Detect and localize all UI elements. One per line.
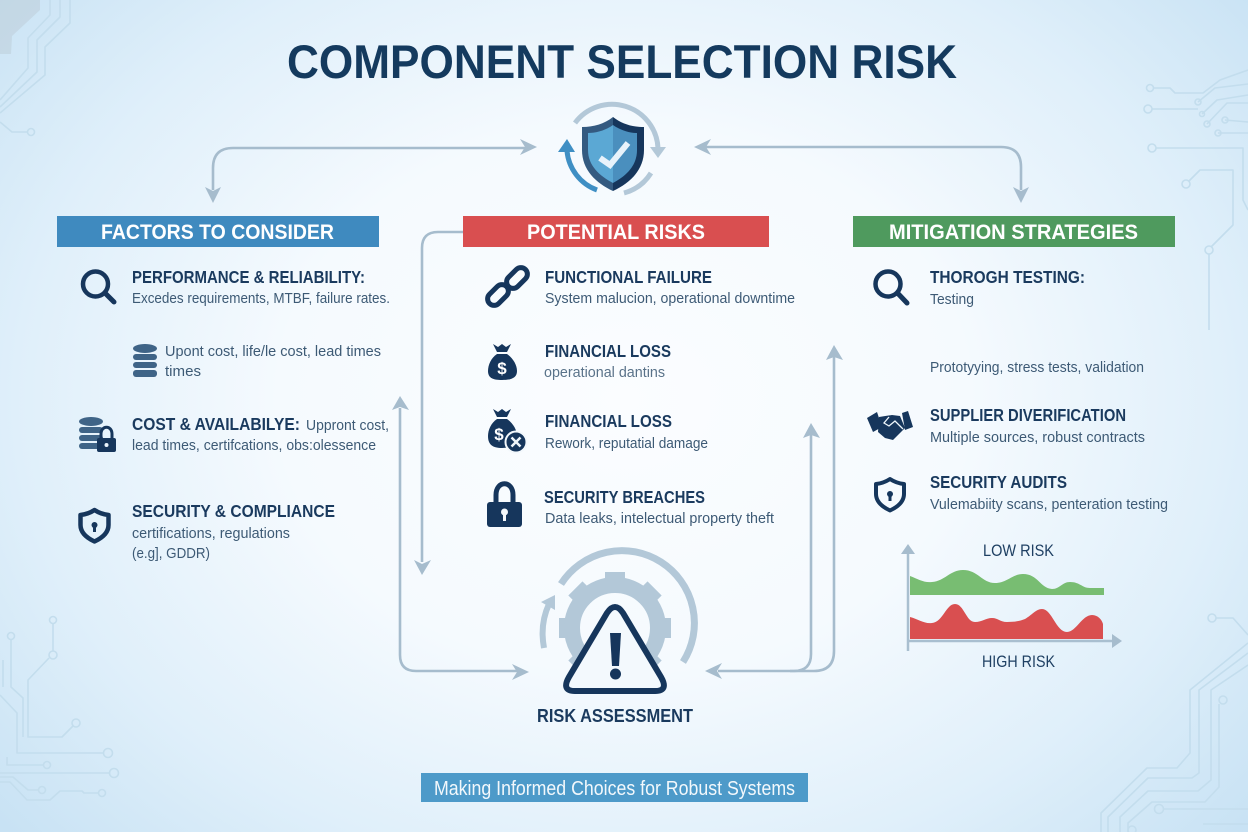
text: thorough testing: THOROGH TESTING: (930, 267, 1085, 287)
text: supplier diversification (930, 405, 1145, 446)
label: high risk: HIGH RISK (982, 653, 1055, 671)
text: cost and availability (132, 414, 389, 454)
icon: chain link (485, 265, 530, 308)
text: financial loss two: FINANCIAL LOSS (545, 411, 672, 431)
text: functional failure: System malucion, operational downtime (545, 290, 795, 307)
text: cost and availability: lead times, certifcations, obs:olessence (132, 437, 376, 454)
heading: factors to consider (57, 216, 379, 247)
text: security audits: SECURITY AUDITS (930, 472, 1067, 492)
text: security breaches: Data leaks, intelectual property theft (545, 510, 775, 527)
text: supplier diversification: Multiple sources, robust contracts (930, 429, 1145, 446)
chart axes (901, 544, 1122, 651)
icon: handshake (867, 411, 913, 440)
panel: mitigation strategies (853, 216, 1175, 671)
text: functional failure: FUNCTIONAL FAILURE (545, 267, 712, 287)
text: security and compliance: certifications, regulations (132, 525, 290, 542)
label: low risk: LOW RISK (983, 542, 1054, 560)
text: functional failure (545, 267, 795, 307)
icon: database (133, 344, 157, 377)
text: prototyping note: Prototyying, stress tests, validation (930, 359, 1144, 376)
text: performance and reliability (132, 267, 390, 307)
arrow: top right connector (694, 139, 1029, 203)
text: financial loss one: operational dantins (544, 364, 665, 381)
label: risk assessment: RISK ASSESSMENT (537, 705, 694, 726)
chart: low and high risk (901, 542, 1122, 671)
icon: money bag: $ (497, 359, 507, 378)
text: security breaches: SECURITY BREACHES (544, 487, 705, 507)
text: security audits (930, 472, 1168, 513)
text: cost note: times (165, 363, 201, 380)
text: cost note (165, 343, 381, 380)
text: security and compliance (132, 501, 335, 562)
icon: magnifier (876, 272, 907, 303)
icon: database with lock (79, 417, 116, 452)
icon: money bag with cross: $ (494, 425, 504, 444)
icon: shield with keyhole (876, 479, 904, 510)
text: performance and reliability: PERFORMANCE & RELIABILITY: (132, 267, 365, 287)
arrow: potential risks down to assessment (414, 232, 463, 575)
area: high risk band (910, 604, 1103, 639)
text: performance and reliability: Excedes requirements, MTBF, failure rates. (132, 290, 390, 307)
footer banner: Making Informed Choices for Robust Systems (434, 777, 795, 800)
icon: shield with keyhole (80, 510, 108, 542)
text: cost and availability: Uppront cost, (306, 417, 389, 434)
heading: potential risks: POTENTIAL RISKS (527, 221, 705, 244)
text: security and compliance: (e.g], GDDR) (132, 545, 210, 562)
text: financial loss two: Rework, reputatial damage (545, 435, 708, 452)
panel: factors to consider (57, 216, 390, 562)
icon: money bag with cross (488, 409, 526, 452)
arrow: top left connector (205, 139, 537, 203)
text: cost note: Upont cost, life/le cost, lead times (165, 343, 381, 360)
text: security and compliance: SECURITY & COMPLIANCE (132, 501, 335, 521)
heading: potential risks (463, 216, 769, 247)
icon: central shield with cycle arrows (558, 104, 666, 193)
panel: potential risks (463, 216, 795, 527)
text: security audits: Vulemabiity scans, penteration testing (930, 496, 1168, 513)
area: low risk band (910, 570, 1104, 595)
text: thorough testing: Testing (930, 291, 974, 308)
text: supplier diversification: SUPPLIER DIVERIFICATION (930, 405, 1126, 425)
title: COMPONENT SELECTION RISK (287, 35, 957, 88)
heading: mitigation strategies: MITIGATION STRATEGIES (889, 221, 1138, 244)
text: cost and availability: COST & AVAILABILYE: (132, 414, 300, 434)
arrow: assessment up to factors (392, 396, 529, 680)
heading: mitigation strategies (853, 216, 1175, 247)
icon: padlock (487, 484, 522, 527)
text: security breaches (544, 487, 775, 527)
text: financial loss one: FINANCIAL LOSS (545, 341, 671, 361)
arrow: assessment up to mitigation (705, 345, 843, 679)
icon: magnifier (83, 272, 114, 302)
text: thorough testing (930, 267, 1085, 308)
icon: money bag (488, 344, 517, 380)
text: financial loss one (544, 341, 671, 381)
text: financial loss two (545, 411, 708, 452)
icon: gear with warning triangle (541, 551, 694, 691)
heading: factors to consider: FACTORS TO CONSIDER (101, 221, 334, 244)
